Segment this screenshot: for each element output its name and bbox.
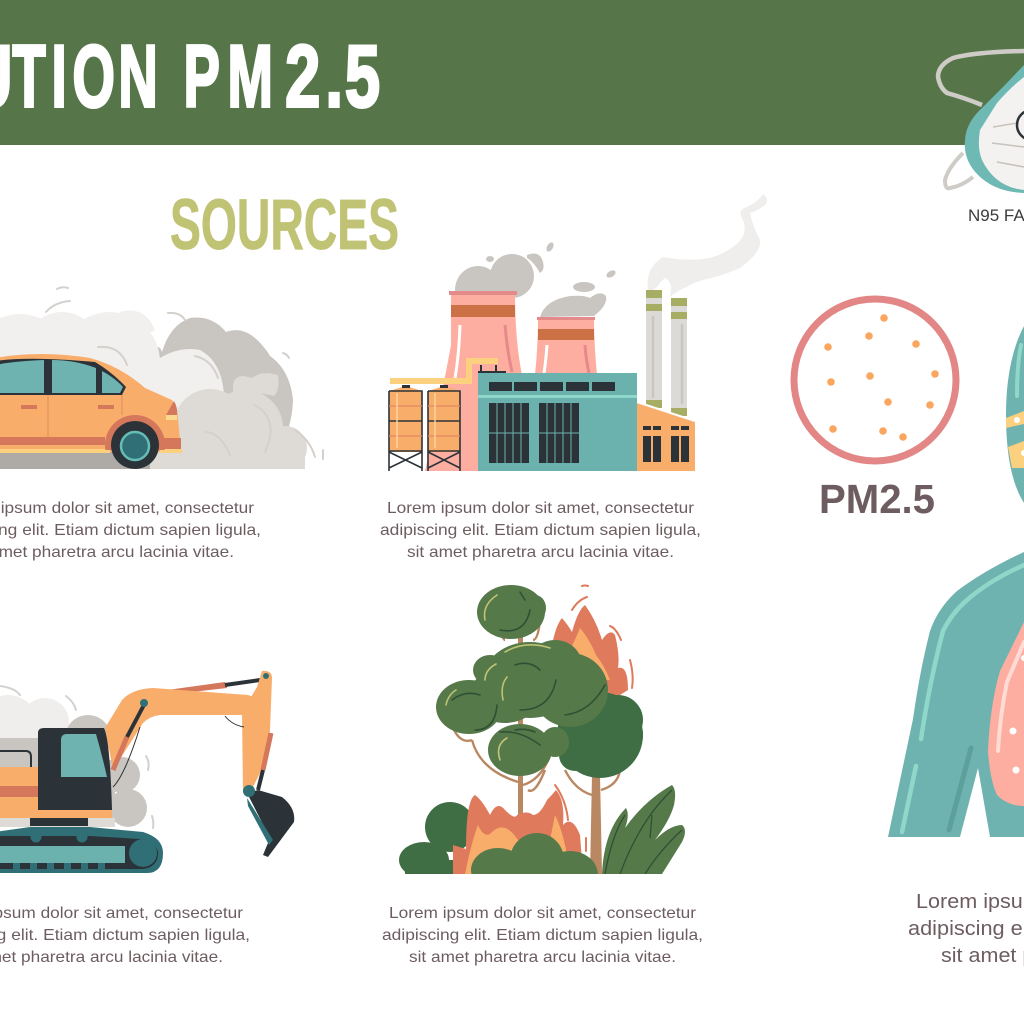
text: car (0, 500, 261, 561)
canopy line details (452, 592, 605, 745)
lung (988, 622, 1024, 806)
tree trunks (518, 630, 602, 874)
illustration: factory (389, 194, 767, 471)
arm (242, 671, 272, 793)
white chimney smoke (648, 194, 767, 297)
heading: sources: SOURCES (170, 186, 399, 265)
illustration: human head (1006, 326, 1024, 503)
mask fold lines (992, 123, 1024, 167)
mask straps (938, 51, 1024, 105)
tower 2 smoke (540, 269, 617, 317)
leaves (602, 785, 685, 874)
teal main building (478, 373, 637, 471)
chimneys (646, 290, 662, 405)
arm cylinder (263, 733, 271, 770)
header banner (0, 0, 1024, 145)
illustration: car with exhaust smoke (0, 287, 323, 475)
wheel arch (105, 415, 165, 450)
text: forest fire: Lorem ipsum dolor sit amet, consectetur (389, 905, 697, 922)
car windows (0, 360, 44, 393)
boom cylinder (127, 703, 145, 737)
dark cloud inner patch (233, 373, 278, 396)
flame sparks (555, 586, 633, 851)
orange annex (637, 403, 695, 471)
text: forest fire (382, 905, 703, 966)
storage tanks (389, 385, 460, 471)
text: forest fire: sit amet pharetra arcu lacinia vitae. (409, 949, 676, 966)
mid smoke cloud (150, 389, 307, 470)
title: 2.5 (285, 28, 380, 126)
text: excavator (0, 905, 250, 966)
text: factory (380, 500, 701, 561)
dark green tree canopy (557, 692, 643, 778)
excavator body (0, 767, 60, 811)
front bushes (471, 833, 598, 874)
road shadow (0, 452, 150, 469)
text: factory: Lorem ipsum dolor sit amet, consectetur (387, 500, 695, 517)
mask teal rim (965, 65, 1024, 193)
boom (105, 688, 258, 770)
hydraulic rod top (160, 682, 227, 695)
mask white body (979, 77, 1024, 190)
main canopy (436, 585, 608, 776)
light smoke cloud (0, 310, 224, 410)
illustration: excavator (0, 671, 294, 873)
text: forest fire: adipiscing elit. Etiam dictum sapien ligula, (382, 927, 703, 944)
sill stripe (0, 437, 105, 445)
dark smoke cloud (155, 318, 293, 440)
leaf veins (605, 790, 682, 874)
label: PM2.5: PM2.5 (819, 476, 935, 522)
door handles (21, 405, 37, 409)
cab (38, 728, 112, 810)
text: factory: sit amet pharetra arcu lacinia vitae. (407, 544, 674, 561)
excavator dust clouds (0, 695, 69, 755)
cooling tower 2 (535, 318, 597, 375)
smoke swirl lines (46, 287, 323, 459)
cooling tower 1 (425, 293, 530, 471)
hoses (113, 716, 244, 787)
back flames (552, 605, 628, 700)
left bushes (399, 802, 468, 874)
window frame (0, 359, 126, 395)
bottom flames (453, 790, 583, 874)
bucket (247, 790, 294, 857)
text: factory: adipiscing elit. Etiam dictum sapien ligula, (380, 522, 701, 539)
wheel (111, 421, 159, 469)
icon: PM2.5 particle circle (794, 299, 956, 461)
illustration: human torso and lungs (888, 552, 1024, 837)
tail light (166, 401, 177, 415)
illustration: forest fire (399, 585, 685, 899)
tower 1 smoke (455, 241, 555, 314)
crawler track (30, 818, 88, 826)
text: right column (908, 891, 1024, 967)
door seams (48, 395, 122, 437)
mask valve (1017, 110, 1024, 140)
car body (0, 354, 181, 452)
yellow pipe (390, 361, 498, 381)
illustration: N95 mask (938, 51, 1024, 193)
